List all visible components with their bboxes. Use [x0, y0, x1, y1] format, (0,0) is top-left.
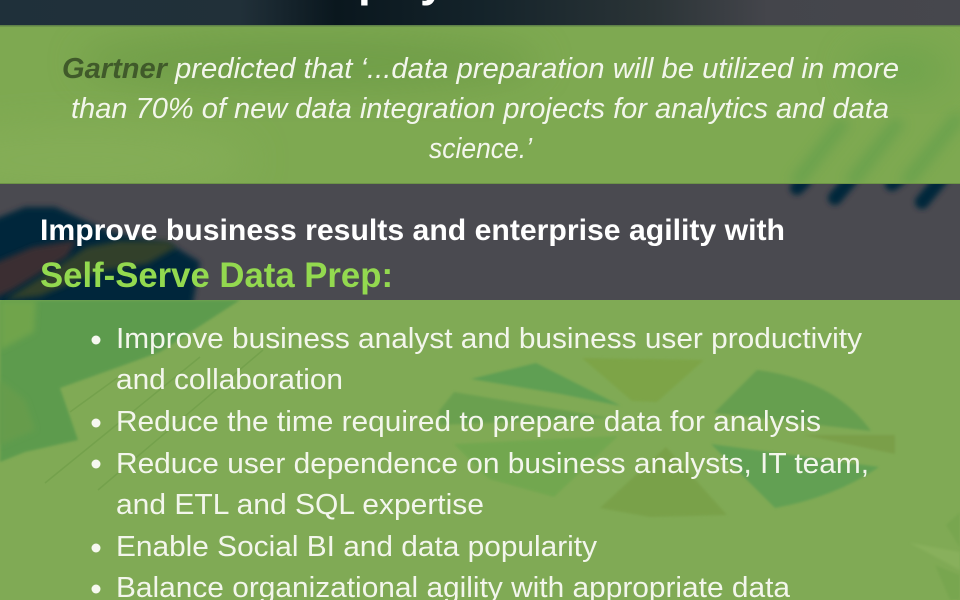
quote text: than 70% of new data integration projects for analytics and data [71, 93, 889, 125]
list text: Enable Social BI and data popularity [116, 531, 598, 563]
panel: Gartner quote [0, 25, 960, 195]
quote text: Gartner [62, 53, 169, 85]
bullets [92, 336, 100, 594]
list text: Reduce user dependence on business analysts, IT team, [116, 448, 869, 480]
panel: title remnant band [0, 0, 960, 26]
list text: and ETL and SQL expertise [116, 489, 484, 521]
quote text: science.’ [429, 133, 533, 165]
heading line: Improve business results and enterprise agility with [40, 214, 785, 247]
quote text: predicted that ‘...data preparation will be utilized in more [174, 53, 899, 85]
list text [116, 323, 869, 600]
panel: benefits list [0, 300, 960, 600]
heading accent: Self-Serve Data Prep: [40, 256, 393, 295]
panel: Self-Serve Data Prep heading band [0, 184, 960, 300]
list text: Improve business analyst and business user productivity [116, 323, 863, 355]
list text: and collaboration [116, 364, 343, 396]
quote text [62, 53, 899, 165]
title fragment [361, 0, 434, 6]
background chart photo [0, 300, 958, 564]
list text: Reduce the time required to prepare data for analysis [116, 406, 821, 438]
